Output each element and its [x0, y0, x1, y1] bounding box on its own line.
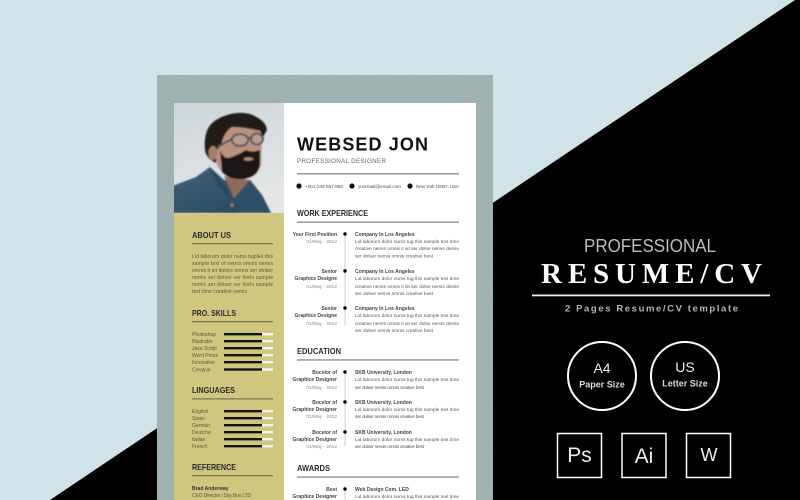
education section: Lid laborum dolor nums tug this sample text time — [355, 407, 459, 413]
sidebar about us: omnis it sit dolors nemis ser dolser — [192, 268, 273, 274]
work experience section: creative nemis omnis it sit ser dolse nemis desire — [355, 284, 459, 290]
work experience section: Company In Los Angeles — [355, 232, 415, 238]
sidebar languages: English — [192, 409, 209, 415]
sidebar languages: Spain — [192, 416, 205, 422]
work experience section: 01/May - 2012 — [306, 321, 337, 327]
badge: US letter size: Letter Size — [662, 378, 708, 388]
name: WEBSED JON — [297, 134, 428, 154]
icon: Illustrator: Ai — [635, 445, 653, 468]
sidebar pro skills: Photoshop — [192, 332, 216, 338]
headline: resume/cv: RESUME/CV — [541, 258, 762, 290]
headline: professional: PROFESSIONAL — [584, 236, 716, 256]
sidebar pro skills: Creative — [192, 368, 211, 374]
awards section — [293, 463, 459, 500]
sidebar pro skills: Word Press — [192, 353, 219, 359]
sidebar pro skills: PRO. SKILLS — [192, 308, 236, 318]
work experience section: ser dolser nemis omnis creative best — [355, 328, 434, 334]
education section: SKB University, London — [355, 370, 412, 376]
work experience section: 01/May - 2012 — [306, 284, 337, 290]
sidebar about us: Lid laborum dolor nums tugilke this — [192, 254, 274, 260]
work experience section: Company In Los Angeles — [355, 269, 415, 275]
education section — [293, 346, 459, 450]
badge: A4 paper size: A4 — [593, 360, 611, 376]
work experience section: Your First Position — [293, 232, 337, 238]
awards section: Graphice Designer — [293, 494, 337, 500]
work experience section: 01/May - 2012 — [306, 239, 337, 245]
sidebar about us: ABOUT US — [192, 230, 231, 240]
sidebar languages: LINGUAGES — [192, 385, 235, 395]
icon: Illustrator — [622, 434, 666, 478]
education section: Bocelor of — [312, 430, 337, 436]
awards section: Best — [326, 487, 337, 493]
sidebar pro skills: Illustrator — [192, 339, 213, 345]
sidebar reference: CEO Director / Sky Box LTD — [192, 493, 251, 499]
badge: A4 paper size — [568, 342, 636, 410]
sidebar reference — [192, 462, 273, 499]
sidebar about us: nemis ser dolser ser thels sample — [192, 275, 273, 281]
contact row: +001-234-567-890 — [305, 184, 343, 190]
sidebar about us: text time creative nemis — [192, 289, 248, 295]
education section: Bocelor of — [312, 400, 337, 406]
subtitle: 2 Pages Resume/CV template — [565, 304, 738, 314]
icon: Photoshop — [558, 434, 602, 478]
icon: Photoshop: Ps — [567, 444, 592, 467]
work experience section: creative nemis omnis it sit ser dolse nemis desire — [355, 321, 459, 327]
sidebar languages: Deutche — [192, 430, 211, 436]
work experience section: ser dolser nemis omnis creative best — [355, 291, 434, 297]
contact row: New York 10007, USA — [416, 184, 460, 190]
photo of man — [170, 103, 284, 213]
sidebar reference: REFERENCE — [192, 462, 236, 472]
awards section: AWARDS — [297, 463, 330, 473]
education section: 01/May - 2012 — [306, 414, 337, 420]
work experience section — [293, 208, 459, 334]
work experience section: ser dolser nemis omnis creative best — [355, 254, 434, 260]
work experience section: Graphice Designe — [294, 313, 337, 319]
job title: PROFESSIONAL DESIGNER — [297, 158, 386, 165]
education section: ser dolser nemis omnis creative best — [355, 444, 425, 450]
awards section: Lid laborum dolor nums tug this sample text time — [355, 494, 459, 500]
sidebar about us: nemis ser dolser ser thels sample — [192, 282, 273, 288]
icon: Word: W — [700, 445, 718, 465]
education section: Lid laborum dolor nums tug this sample text time — [355, 437, 459, 443]
sidebar languages — [192, 385, 273, 450]
glasses — [232, 134, 263, 146]
icon: Word — [686, 434, 730, 478]
resume sheet — [174, 103, 476, 500]
sidebar about us — [192, 230, 274, 295]
sidebar reference: Brad Anderway — [192, 486, 229, 492]
resume paper backdrop — [157, 75, 493, 500]
work experience section: WORK EXPERIENCE — [297, 208, 368, 218]
sidebar — [174, 213, 284, 500]
education section: 01/May - 2012 — [306, 385, 337, 391]
work experience section: Lid laborum dolor nums tug this sample text time — [355, 239, 459, 245]
badge: US letter size — [651, 342, 719, 410]
work experience section: Senior — [321, 269, 337, 275]
sidebar about us: sample text of nemis omnis nemis — [192, 261, 274, 267]
work experience section: Lid laborum dolor nums tug this sample text time — [355, 313, 459, 319]
education section: EDUCATION — [297, 346, 341, 356]
contact row — [296, 183, 460, 190]
education section: Graphice Designer — [293, 437, 337, 443]
work experience section: Graphice Designe — [294, 276, 337, 282]
contact row: yuormail@email.com — [358, 184, 401, 190]
sidebar languages: French — [192, 444, 208, 450]
sidebar pro skills: Java Script — [192, 346, 217, 352]
work experience section: Lid laborum dolor nums tug this sample text time — [355, 276, 459, 282]
education section: Bocelor of — [312, 370, 337, 376]
education section: ser dolser nemis omnis creative best — [355, 414, 425, 420]
badge: US letter size: US — [675, 359, 695, 375]
sidebar pro skills: Innovative — [192, 360, 215, 366]
work experience section: Senior — [321, 306, 337, 312]
sidebar languages: Italian — [192, 437, 206, 443]
education section: Lid laborum dolor nums tug this sample text time — [355, 377, 459, 383]
work experience section: Company In Los Angeles — [355, 306, 415, 312]
education section: SKB University, London — [355, 430, 412, 436]
education section: SKB University, London — [355, 400, 412, 406]
education section: Graphice Designer — [293, 377, 337, 383]
badge: A4 paper size: Paper Size — [579, 380, 625, 390]
education section: Graphice Designer — [293, 407, 337, 413]
sidebar pro skills — [192, 308, 273, 374]
education section: 01/May - 2012 — [306, 444, 337, 450]
education section: ser dolser nemis omnis creative best — [355, 385, 425, 391]
awards section: Web Design Com. LED — [355, 487, 409, 493]
sidebar languages: German — [192, 423, 210, 429]
work experience section: creative nemis omnis it sit ser dolse nemis desire — [355, 246, 459, 252]
